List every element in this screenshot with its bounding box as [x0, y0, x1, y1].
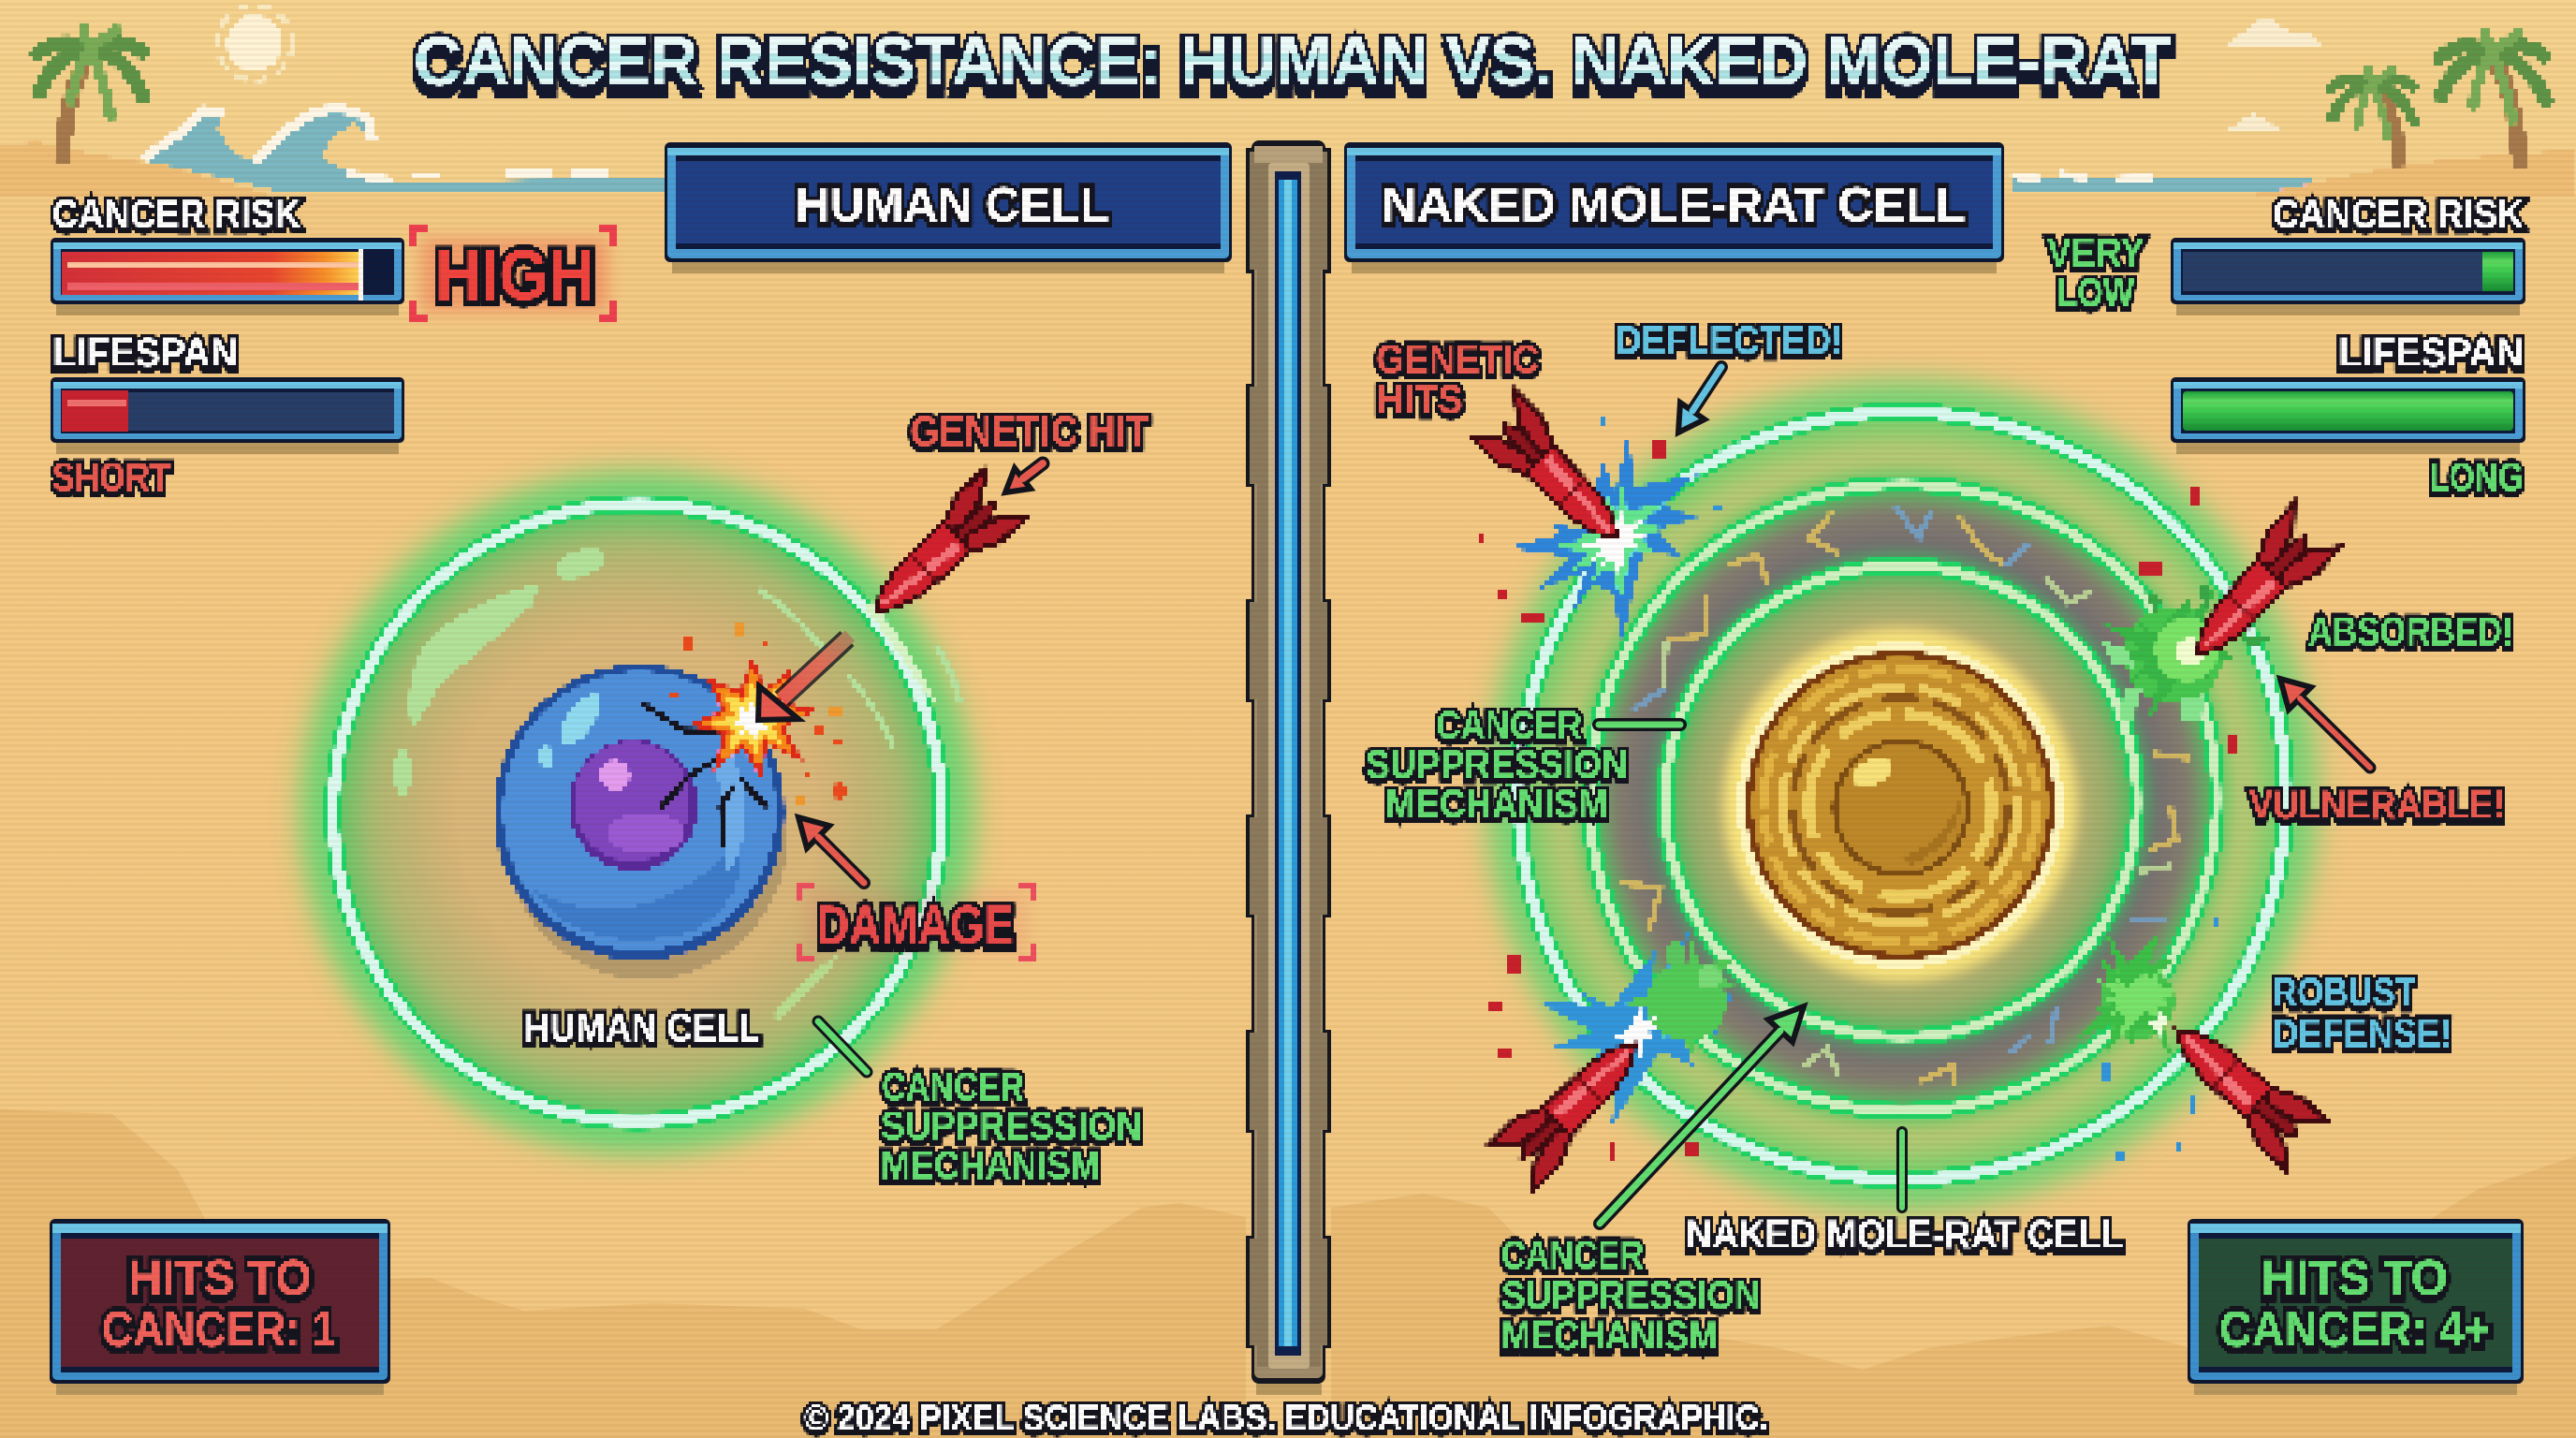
hits box: naked mole-rat [2188, 1219, 2524, 1395]
label cancer suppression mechanism: CANCER [882, 1064, 1024, 1109]
shield rings [1518, 412, 2286, 1180]
label cancer risk: CANCER RISK [2273, 192, 2524, 237]
burst: robust defense right [2038, 909, 2214, 1091]
bubble glow [327, 497, 948, 1128]
inner zone [1665, 565, 2137, 1037]
outer glow [1513, 406, 2291, 1185]
band cracks [1620, 506, 2188, 1087]
label genetic hit: GENETIC HIT [910, 407, 1149, 455]
grey protective band [1589, 484, 2217, 1111]
label robust defense: DEFENSE! [2273, 1011, 2452, 1056]
label cancer suppression mechanism: MECHANISM [881, 1143, 1100, 1188]
label robust defense: ROBUST [2273, 970, 2416, 1015]
label absorbed: ABSORBED! [2308, 609, 2513, 654]
label lifespan: LIFESPAN [2338, 330, 2524, 375]
translucent outer zone [1523, 417, 2281, 1175]
label band suppression mechanism: MECHANISM [1385, 782, 1608, 827]
human lifespan bar [51, 377, 404, 454]
burst: absorbed [2075, 548, 2273, 741]
burst: robust blue left [1505, 890, 1753, 1151]
gold nucleus cell [1737, 642, 2063, 968]
dune shading lower area [0, 1109, 2576, 1438]
impact bursts [1479, 417, 2273, 1163]
embers [670, 624, 846, 803]
stat labels [52, 192, 594, 500]
label very low second line: LOW [2057, 271, 2134, 315]
label genetic hits: HITS [1376, 377, 1463, 422]
value long: LONG [2429, 455, 2524, 500]
cell shadow [504, 683, 788, 979]
label lower suppression mechanism: SUPPRESSION [1501, 1273, 1761, 1318]
hits box: human: CANCER: 1 [102, 1301, 336, 1357]
label deflected: DEFLECTED! [1616, 318, 1843, 363]
hits box: human: HITS TO [128, 1250, 312, 1306]
label lower suppression mechanism [1501, 1233, 1761, 1358]
panel: naked mole-rat cell header [1344, 142, 2004, 273]
label cancer risk: CANCER RISK [52, 192, 300, 237]
footer credit: © 2024 PIXEL SCIENCE LABS. EDUCATIONAL INFOGRAPHIC. [804, 1399, 1768, 1438]
mole-rat diagram labels [1366, 318, 2513, 1358]
label lower suppression mechanism: CANCER [1501, 1233, 1644, 1278]
label vulnerable: VULNERABLE! [2249, 783, 2505, 828]
arrow to vulnerable point [2280, 679, 2370, 768]
label band suppression mechanism: SUPPRESSION [1366, 742, 1628, 787]
hits box: naked mole-rat: HITS TO [2261, 1250, 2448, 1306]
damage brackets [799, 886, 1033, 959]
membrane ring and cell [333, 470, 1027, 1122]
burst: deflected [1509, 431, 1697, 639]
arrow to damage [798, 817, 864, 883]
panel: naked mole-rat cell header: NAKED MOLE-RAT CELL [1382, 178, 1966, 232]
stat labels [2047, 192, 2524, 500]
human diagram labels [524, 407, 1149, 1188]
bubble interior [336, 506, 939, 1119]
label band suppression mechanism [1366, 703, 1628, 827]
hits box: naked mole-rat: CANCER: 4+ [2219, 1301, 2491, 1357]
label naked mole-rat cell: NAKED MOLE-RAT CELL [1686, 1212, 2123, 1257]
title: CANCER RESISTANCE: HUMAN VS. NAKED MOLE-RAT [414, 22, 2172, 100]
leader to cell label [1896, 1132, 1908, 1208]
mole-rat lifespan bar [2171, 377, 2525, 454]
hits box: human [50, 1219, 390, 1395]
debris [1479, 442, 2239, 1161]
right stats: cancer risk and lifespan [2047, 192, 2525, 500]
rockets: genetic hits [1471, 391, 2340, 1191]
value high: HIGH [435, 236, 594, 315]
high badge brackets [413, 228, 613, 318]
label genetic hits [1376, 337, 1539, 422]
rocket: genetic hit [854, 470, 1027, 635]
value short: SHORT [52, 455, 170, 500]
central divider column [1246, 140, 1331, 1395]
panel: human cell header: HUMAN CELL [796, 178, 1109, 232]
panel: human cell header [665, 142, 1232, 273]
leader to band mechanism [1599, 718, 1680, 731]
diagram: naked mole-rat cell [1366, 318, 2513, 1358]
diagram: human cell [327, 407, 1149, 1188]
left stats: cancer risk and lifespan [51, 192, 613, 500]
membrane cracks [643, 704, 769, 847]
arrow to genetic hit rocket [1005, 463, 1043, 492]
mole-rat cancer risk bar [2171, 238, 2525, 315]
label very low: VERY [2047, 230, 2144, 275]
label robust defense [2273, 970, 2452, 1056]
label lifespan: LIFESPAN [52, 330, 238, 375]
human cancer risk bar [51, 238, 404, 315]
rocket impact arrow [758, 636, 850, 720]
scene: sun, palms, waves [0, 6, 2576, 197]
label damage: DAMAGE [817, 895, 1014, 956]
arrow to deflected hit [1678, 367, 1721, 433]
ring glows [1589, 484, 2217, 1111]
label human cell: HUMAN CELL [524, 1005, 760, 1050]
label lower suppression mechanism: MECHANISM [1501, 1313, 1718, 1358]
nucleus [569, 740, 698, 871]
gold glow [1724, 629, 2076, 981]
label cancer suppression mechanism: SUPPRESSION [881, 1104, 1142, 1149]
label cancer suppression mechanism [881, 1064, 1142, 1188]
impact explosion [688, 656, 817, 779]
label genetic hits: GENETIC [1376, 337, 1539, 382]
arrow to inner mechanism [1600, 1006, 1804, 1224]
human cell body [494, 665, 784, 961]
leader to suppression mechanism [818, 1021, 867, 1072]
label band suppression mechanism: CANCER [1436, 703, 1582, 748]
